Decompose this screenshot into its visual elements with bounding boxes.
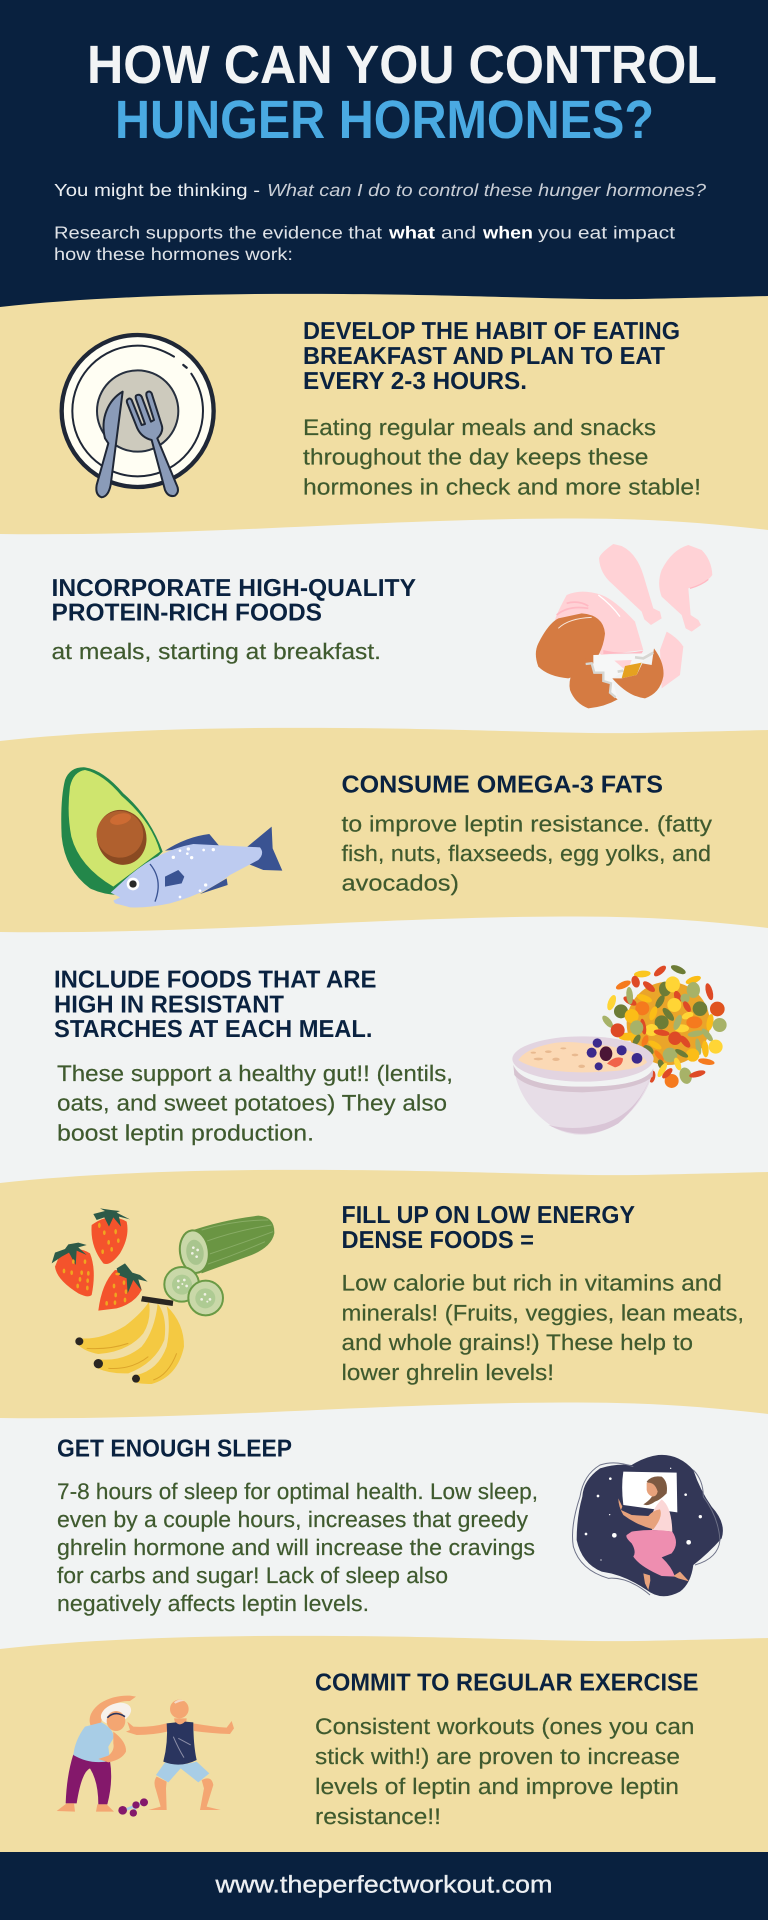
body text: These support a healthy gut!! (lentils, <box>57 1061 453 1086</box>
heading: INCORPORATE HIGH-QUALITY <box>52 575 416 602</box>
heading: BREAKFAST AND PLAN TO EAT <box>303 343 665 370</box>
icon: bowl of oats and lentils <box>512 963 727 1135</box>
panel: exercise <box>0 1636 768 1862</box>
lentil pile <box>600 963 727 1088</box>
panel: footer <box>0 1852 768 1920</box>
panel: sleep <box>0 1402 768 1674</box>
body text <box>342 1270 744 1385</box>
body text: lower ghrelin levels! <box>342 1360 554 1385</box>
body text: oats, and sweet potatoes) They also <box>57 1090 447 1116</box>
title <box>87 35 717 150</box>
heading: STARCHES AT EACH MEAL. <box>54 1016 372 1043</box>
intro research text: Research supports the evidence that <box>54 222 382 242</box>
body text: Eating regular meals and snacks <box>303 415 656 440</box>
heading: COMMIT TO REGULAR EXERCISE <box>315 1670 698 1696</box>
body text: minerals! (Fruits, veggies, lean meats, <box>342 1300 744 1326</box>
body text <box>342 812 713 896</box>
title: HUNGER HORMONES? <box>115 90 654 150</box>
heading <box>52 575 416 626</box>
body text: Consistent workouts (ones you can <box>315 1714 694 1739</box>
body text <box>315 1714 694 1829</box>
intro question: You might be thinking - <box>54 180 260 200</box>
body text: even by a couple hours, increases that greedy <box>57 1507 529 1532</box>
heading <box>303 318 680 395</box>
icon: older couple exercising <box>57 1696 234 1817</box>
intro research text: when <box>482 222 533 242</box>
body text <box>303 415 701 500</box>
title: HOW CAN YOU CONTROL <box>87 35 717 95</box>
website url: www.theperfectworkout.com <box>214 1872 552 1898</box>
heading: GET ENOUGH SLEEP <box>57 1436 292 1462</box>
panel: low energy dense foods <box>0 1170 768 1436</box>
heading: DENSE FOODS = <box>342 1227 534 1254</box>
body text: at meals, starting at breakfast. <box>52 639 381 664</box>
body text: stick with!) are proven to increase <box>315 1744 680 1769</box>
heading: HIGH IN RESISTANT <box>54 992 284 1018</box>
body text <box>57 1061 453 1146</box>
body text: Low calorie but rich in vitamins and <box>342 1270 722 1296</box>
panel: omega-3 <box>0 728 768 964</box>
panel: protein <box>0 518 768 760</box>
heading: INCLUDE FOODS THAT ARE <box>54 966 376 994</box>
intro question: What can I do to control these hunger hormones? <box>267 180 706 200</box>
body text <box>57 1479 538 1616</box>
bowl <box>512 1036 654 1135</box>
body text: and whole grains!) These help to <box>342 1330 693 1355</box>
heading: DEVELOP THE HABIT OF EATING <box>303 318 680 345</box>
intro research text <box>54 222 675 264</box>
intro research text: you eat impact <box>538 222 675 242</box>
panel: resistant starches <box>0 916 768 1188</box>
icon: chicken and eggs <box>536 544 712 708</box>
heading <box>342 1202 635 1254</box>
intro question <box>54 180 706 200</box>
heading <box>54 966 376 1043</box>
body text: avocados) <box>342 870 459 896</box>
body text: boost leptin production. <box>57 1120 314 1146</box>
panel: breakfast habit <box>0 294 768 560</box>
body text: 7-8 hours of sleep for optimal health. Low sleep, <box>57 1479 538 1504</box>
body text: throughout the day keeps these <box>303 444 648 470</box>
body text: fish, nuts, flaxseeds, egg yolks, and <box>342 841 711 866</box>
intro research text: how these hormones work: <box>54 244 293 264</box>
heading: EVERY 2-3 HOURS. <box>303 368 527 395</box>
intro research text: what <box>388 222 435 242</box>
body text: to improve leptin resistance. (fatty <box>342 812 713 836</box>
body text: negatively affects leptin levels. <box>57 1591 369 1616</box>
body text: for carbs and sugar! Lack of sleep also <box>57 1563 448 1588</box>
icon: plate with knife and fork <box>62 335 214 497</box>
heading: PROTEIN-RICH FOODS <box>52 600 322 626</box>
body text: levels of leptin and improve leptin <box>315 1774 679 1799</box>
heading: CONSUME OMEGA-3 FATS <box>342 772 663 798</box>
panel: header <box>0 0 768 330</box>
icon: strawberries, cucumber and bananas <box>52 1208 274 1384</box>
intro research text: and <box>441 222 476 242</box>
icon: woman sleeping <box>572 1455 723 1596</box>
body text: resistance!! <box>315 1804 441 1829</box>
heading: FILL UP ON LOW ENERGY <box>342 1202 635 1229</box>
icon: avocado and fish <box>61 767 282 907</box>
body text: ghrelin hormone and will increase the cravings <box>57 1535 535 1560</box>
body text: hormones in check and more stable! <box>303 474 701 500</box>
